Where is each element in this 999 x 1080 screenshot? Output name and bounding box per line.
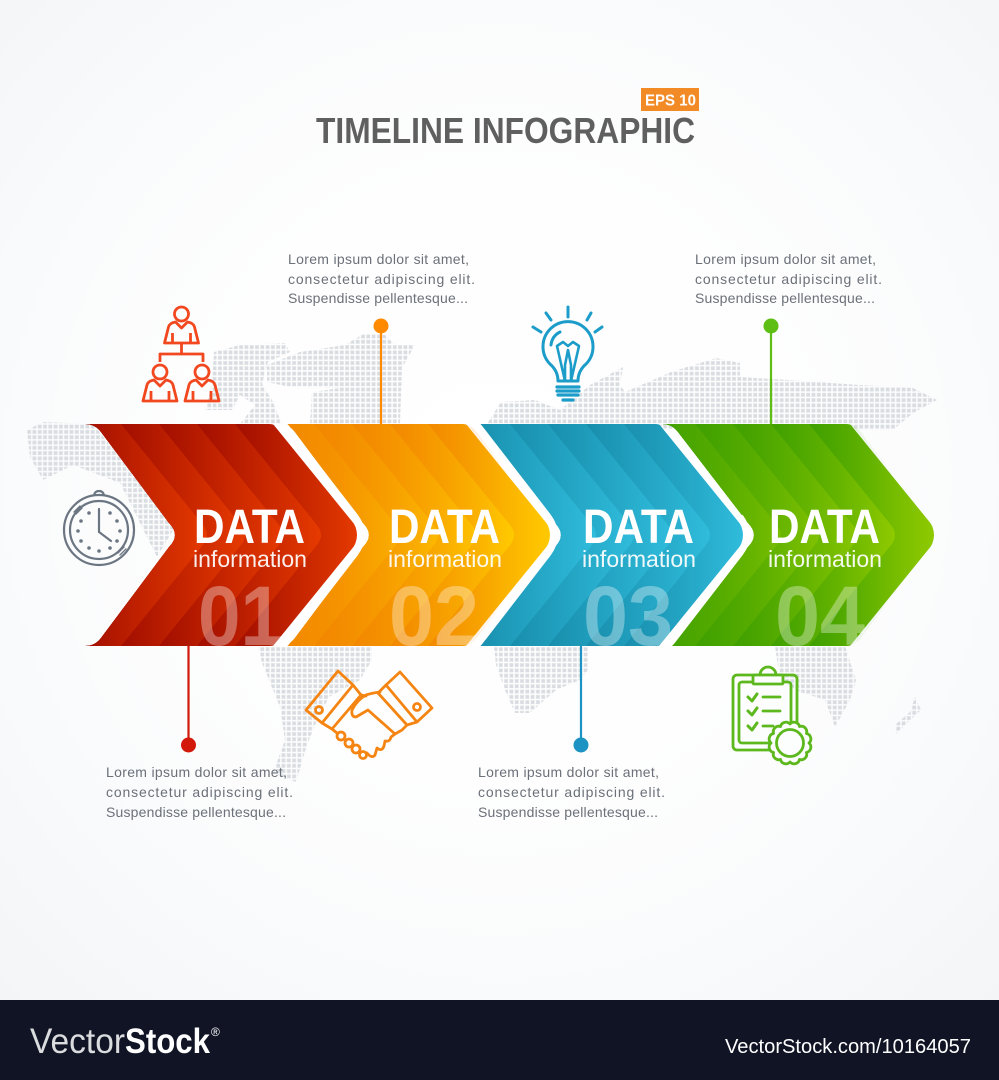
arrow 1: red: 01 bbox=[198, 569, 283, 663]
arrow 3: blue bbox=[480, 424, 747, 646]
footer registered mark: ® bbox=[211, 1025, 220, 1039]
arrow 2: orange bbox=[288, 424, 556, 646]
footer url: VectorStock.com/10164057 bbox=[725, 1036, 971, 1058]
icon: stopwatch clock bbox=[64, 491, 134, 565]
arrow 2: orange: DATA bbox=[389, 501, 500, 554]
text block: step 2: consectetur adipiscing elit. bbox=[288, 271, 475, 287]
badge: EPS 10 bbox=[641, 88, 699, 111]
pin: step 1 red bbox=[181, 644, 196, 752]
text block: step 1: Lorem ipsum dolor sit amet, bbox=[106, 764, 287, 780]
arrow 3: blue: information bbox=[582, 546, 696, 572]
title: TIMELINE INFOGRAPHIC bbox=[316, 110, 695, 151]
icon: light bulb bbox=[533, 307, 602, 400]
arrow 4: green: information bbox=[768, 546, 882, 572]
text block: step 3 bbox=[478, 764, 665, 820]
arrow 3: blue: DATA bbox=[583, 501, 694, 554]
arrow 2: orange: information bbox=[388, 546, 502, 572]
text block: step 3: consectetur adipiscing elit. bbox=[478, 784, 665, 800]
text block: step 3: Suspendisse pellentesque... bbox=[478, 804, 658, 820]
arrow 1: red: information bbox=[193, 546, 307, 572]
footer logo: VectorStock bbox=[30, 1022, 210, 1061]
pin: step 3 blue bbox=[574, 644, 588, 752]
text block: step 3: Lorem ipsum dolor sit amet, bbox=[478, 764, 659, 780]
text block: step 4: Lorem ipsum dolor sit amet, bbox=[695, 251, 876, 267]
footer bar bbox=[0, 1000, 999, 1080]
arrow 4: green bbox=[662, 424, 934, 646]
text block: step 4: Suspendisse pellentesque... bbox=[695, 290, 875, 306]
icon: clipboard checklist with gear bbox=[733, 667, 811, 764]
text block: step 4 bbox=[695, 251, 882, 306]
arrow 2: orange: 02 bbox=[389, 569, 479, 663]
dotted world map bbox=[27, 333, 937, 782]
text block: step 1: Suspendisse pellentesque... bbox=[106, 804, 286, 820]
icon: handshake bbox=[306, 671, 432, 758]
text block: step 2 bbox=[288, 251, 475, 306]
text block: step 1: consectetur adipiscing elit. bbox=[106, 784, 293, 800]
arrow 4: green: 04 bbox=[775, 569, 865, 663]
text block: step 2: Suspendisse pellentesque... bbox=[288, 290, 468, 306]
arrow 3: blue: 03 bbox=[583, 569, 673, 663]
text block: step 4: consectetur adipiscing elit. bbox=[695, 271, 882, 287]
arrow 4: green: DATA bbox=[769, 501, 880, 554]
pin: step 2 orange bbox=[374, 318, 388, 426]
badge: EPS 10: EPS 10 bbox=[645, 92, 696, 110]
arrow 1: red: DATA bbox=[194, 501, 305, 554]
text block: step 1 bbox=[106, 764, 293, 820]
icon: organisation chart people bbox=[143, 307, 219, 401]
arrow 1: red bbox=[86, 424, 362, 646]
text block: step 2: Lorem ipsum dolor sit amet, bbox=[288, 251, 469, 267]
pin: step 4 green bbox=[764, 318, 778, 426]
